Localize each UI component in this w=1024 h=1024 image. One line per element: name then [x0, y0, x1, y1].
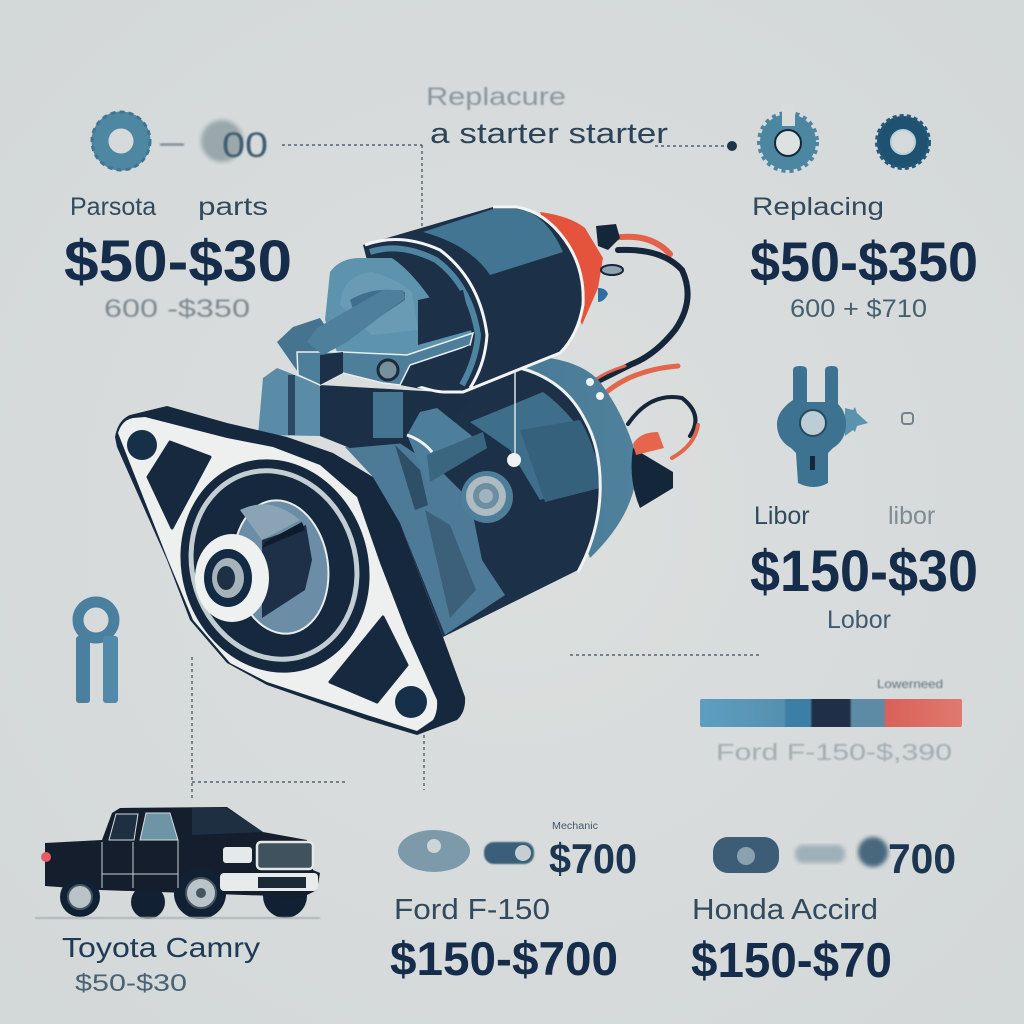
panel: parts cost left: 600 -$350: [104, 295, 250, 323]
legend colour bar: [700, 677, 962, 765]
illustration: pickup truck: [35, 807, 320, 919]
panel: Toyota Camry: Toyota Camry: [62, 932, 260, 963]
solenoid cylinder: [363, 207, 583, 392]
panel: replacing cost right: 600 + $710: [790, 295, 927, 323]
truck body: [45, 807, 320, 897]
panel: labor cost right: [750, 502, 978, 634]
panel: parts cost left: $50-$30: [64, 229, 292, 294]
icon: gears top left: 00: [222, 126, 268, 165]
panel: labor cost right: $150-$30: [750, 539, 978, 604]
legend colour bar: Ford F-150-$,390: [716, 739, 952, 765]
panel: Ford F-150: Ford F-150: [394, 894, 550, 926]
panel: labor cost right: libor: [888, 502, 935, 530]
panel: Toyota Camry: $50-$30: [75, 970, 187, 997]
title: Replacure: [426, 83, 566, 111]
wires: [592, 237, 698, 458]
legend colour bar: Lowerneed: [877, 677, 943, 691]
panel: labor cost right: Libor: [754, 502, 810, 530]
panel: replacing cost right: Replacing: [752, 193, 884, 221]
panel: Ford F-150: Mechanic: [552, 821, 598, 832]
panel: Ford F-150: [390, 821, 637, 985]
panel: replacing cost right: [750, 193, 978, 323]
illustration: starter motor: [115, 207, 698, 735]
icon: wrench right: [777, 366, 913, 487]
panel: Honda Accord: Honda Accird: [692, 894, 878, 926]
panel: parts cost left: Parsota: [70, 193, 156, 221]
panel: labor cost right: Lobor: [827, 606, 891, 634]
icon: wrench left: [76, 602, 118, 703]
panel: Honda Accord: [691, 835, 956, 988]
icon: key fob: [398, 830, 534, 872]
clamp: [407, 408, 487, 482]
solenoid red end: [540, 212, 623, 325]
boss and pointer: [461, 370, 521, 523]
panel: Ford F-150: $700: [549, 835, 637, 882]
panel: replacing cost right: $50-$350: [750, 230, 978, 293]
panel: parts cost left: parts: [198, 193, 268, 221]
icon: gears top right: [759, 104, 929, 171]
motor body: [345, 368, 600, 637]
solenoid neck blocks: [258, 368, 470, 448]
dotted leader lines: [192, 145, 762, 800]
wheels: [60, 867, 307, 919]
icon: key fob dark: [713, 837, 888, 873]
solenoid housing: [277, 258, 473, 388]
panel: Honda Accord: 700: [888, 835, 956, 882]
icon: gears top left: [92, 112, 268, 170]
panel: Ford F-150: $150-$700: [390, 932, 618, 985]
title: [426, 83, 668, 150]
panel: Toyota Camry: [62, 932, 260, 997]
panel: Honda Accord: $150-$70: [691, 934, 892, 988]
panel: parts cost left: [64, 193, 292, 323]
motor end cap: [520, 358, 673, 558]
front face rings: [153, 435, 397, 697]
marker dot: [727, 141, 737, 151]
title: a starter starter: [430, 118, 668, 150]
mounting flange: [115, 406, 465, 735]
